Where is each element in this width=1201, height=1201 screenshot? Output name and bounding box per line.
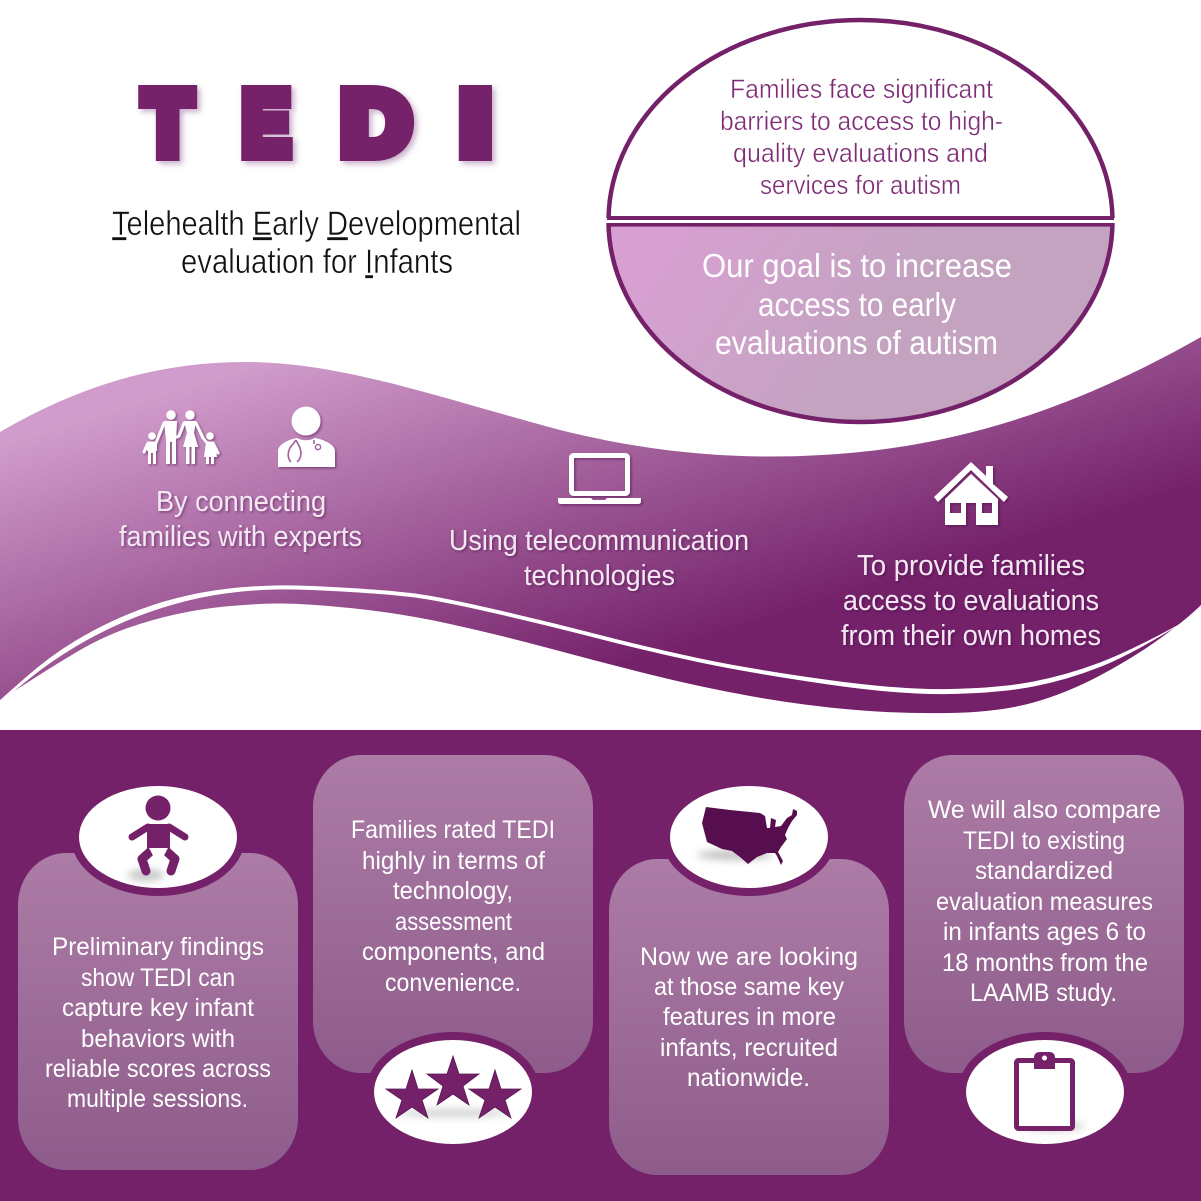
goal text [702, 247, 1012, 361]
problem half [606, 18, 1115, 220]
icon: laptop [558, 456, 641, 504]
problem text: quality evaluations and [733, 138, 988, 168]
card 3 text [640, 943, 858, 1092]
text: access from home: access to evaluations [843, 585, 1099, 617]
card 2 text: assessment [395, 908, 512, 936]
subtitle [112, 205, 521, 281]
icon: family [144, 410, 218, 464]
TEDI title: D [341, 74, 411, 174]
card 1 text: multiple sessions. [67, 1085, 248, 1113]
card 3 text: at those same key [654, 973, 844, 1001]
text: access from home: To provide families [857, 550, 1085, 582]
subtitle: Telehealth Early Developmental [112, 205, 521, 243]
card 2 text [351, 816, 555, 997]
white swoosh [0, 585, 1187, 700]
subtitle: evaluation for Infants [181, 243, 453, 281]
card 4 text: TEDI to existing [963, 827, 1125, 855]
text: access from home [841, 550, 1101, 652]
goal half [606, 223, 1115, 424]
card 3 text: infants, recruited [660, 1034, 838, 1062]
text: connecting families [119, 486, 362, 553]
icon: three stars [386, 1056, 521, 1118]
text: telecommunication [449, 525, 749, 592]
card 4 text: LAAMB study. [970, 979, 1117, 1007]
TEDI title: T [144, 74, 192, 174]
text: connecting families: By connecting [156, 486, 326, 518]
card 1: preliminary findings [18, 778, 298, 1170]
card 4 text: We will also compare [928, 796, 1161, 824]
card 3: nationwide [609, 778, 889, 1175]
text: telecommunication: Using telecommunication [449, 525, 749, 557]
oval badge: stars [366, 1032, 540, 1152]
problem text [720, 74, 1003, 200]
oval badge: baby [71, 778, 245, 896]
oval badge: clipboard [958, 1032, 1132, 1152]
card 2 text: highly in terms of [362, 847, 545, 875]
TEDI title: E [242, 74, 290, 174]
card 2 text: Families rated TEDI [351, 816, 555, 844]
card 2 text: technology, [393, 877, 513, 905]
card 3 text: nationwide. [687, 1064, 810, 1092]
card 4 text: standardized [975, 857, 1113, 885]
icon: baby [132, 796, 185, 871]
TEDI title [144, 74, 491, 174]
card 1 text: behaviors with [81, 1025, 235, 1053]
card 4 text: evaluation measures [936, 888, 1153, 916]
card 1 text: reliable scores across [45, 1055, 271, 1083]
text: access from home: from their own homes [841, 620, 1101, 652]
card 4: comparison [904, 755, 1184, 1152]
panel: problem and goal circle [607, 20, 1114, 422]
goal text: evaluations of autism [715, 324, 998, 361]
icon: USA map [702, 807, 797, 865]
icon: house [934, 462, 1008, 525]
TEDI title: I [460, 74, 491, 174]
card 2: family ratings [313, 755, 593, 1152]
card 2 text: convenience. [385, 969, 521, 997]
card 1 text: Preliminary findings [52, 933, 264, 961]
card 1 text: capture key infant [62, 994, 254, 1022]
card 4 text: 18 months from the [942, 949, 1148, 977]
icon: doctor [278, 406, 335, 467]
problem text: barriers to access to high- [720, 106, 1003, 136]
card 1 text: show TEDI can [81, 964, 235, 992]
card 3 text: Now we are looking [640, 943, 858, 971]
card 1 text [45, 933, 271, 1113]
card 2 text: components, and [362, 938, 545, 966]
problem text: services for autism [760, 170, 961, 200]
icon: clipboard [1016, 1052, 1072, 1128]
panel: findings background [0, 730, 1201, 1201]
card 4 text: in infants ages 6 to [943, 918, 1146, 946]
card 4 text [928, 796, 1161, 1007]
oval badge: USA [662, 778, 836, 896]
wave band [0, 337, 1201, 713]
goal text: Our goal is to increase [702, 247, 1012, 284]
text: telecommunication: technologies [524, 560, 675, 592]
text: connecting families: families with experts [119, 521, 362, 553]
card 3 text: features in more [663, 1003, 836, 1031]
problem text: Families face significant [730, 74, 993, 104]
goal text: access to early [758, 286, 956, 323]
